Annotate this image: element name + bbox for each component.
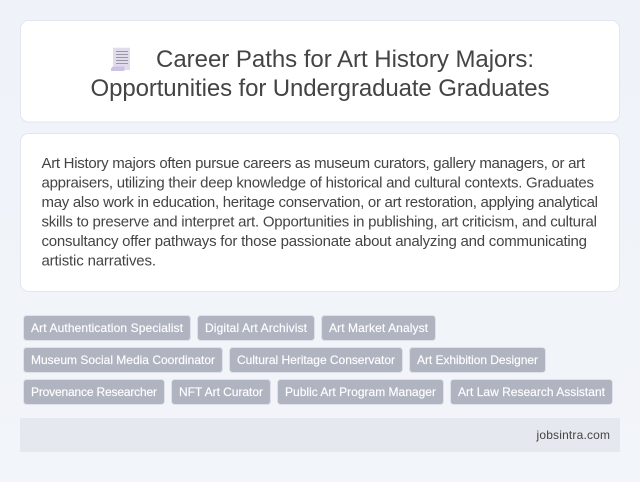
title text: Career Paths for Art History Majors:	[156, 46, 534, 73]
tag: Public Art Program Manager	[278, 380, 444, 404]
tag: NFT Art Curator: NFT Art Curator	[179, 385, 263, 399]
panel: title card	[20, 20, 620, 122]
footer source text: jobsintra.com	[536, 428, 610, 442]
description text: artistic narratives.	[42, 252, 156, 270]
tag: Museum Social Media Coordinator: Museum Social Media Coordinator	[31, 353, 215, 367]
tag: Cultural Heritage Conservator: Cultural Heritage Conservator	[237, 353, 395, 367]
tag: Art Authentication Specialist	[24, 316, 190, 340]
tag: Cultural Heritage Conservator	[230, 348, 402, 372]
description text: skills to preserve and interpret art. Opportunities in publishing, art criticism, and cultural	[42, 214, 597, 230]
description text	[42, 155, 598, 270]
tag list	[24, 316, 612, 404]
title text: Opportunities for Undergraduate Graduates	[90, 75, 550, 102]
title text	[90, 46, 550, 102]
tag: Art Authentication Specialist: Art Authentication Specialist	[31, 321, 184, 335]
tag: NFT Art Curator	[172, 380, 270, 404]
description text: appraisers, utilizing their deep knowledge of historical and cultural contexts. Graduates	[42, 174, 594, 192]
tag: Provenance Researcher: Provenance Researcher	[31, 385, 157, 399]
description text: may also work in education, heritage conservation, or art restoration, applying analytical	[42, 194, 598, 211]
tag: Public Art Program Manager: Public Art Program Manager	[285, 385, 436, 399]
tag: Art Law Research Assistant	[450, 380, 612, 404]
tag: Digital Art Archivist: Digital Art Archivist	[205, 321, 308, 335]
icon: receipt scroll	[111, 48, 130, 71]
description text: Art History majors often pursue careers as museum curators, gallery managers, or art	[42, 155, 586, 172]
footer	[20, 418, 620, 452]
description text: consultancy offer pathways for those passionate about analyzing and communicating	[42, 233, 587, 250]
tag: Art Market Analyst	[322, 316, 436, 340]
tag: Museum Social Media Coordinator	[24, 348, 222, 372]
tag: Art Exhibition Designer: Art Exhibition Designer	[417, 353, 538, 367]
tag: Art Law Research Assistant: Art Law Research Assistant	[458, 385, 606, 399]
tag: Art Exhibition Designer	[410, 348, 546, 372]
tag: Provenance Researcher	[24, 380, 164, 404]
tag: Digital Art Archivist	[198, 316, 314, 340]
panel: description	[20, 134, 620, 292]
tag: Art Market Analyst: Art Market Analyst	[329, 321, 429, 335]
